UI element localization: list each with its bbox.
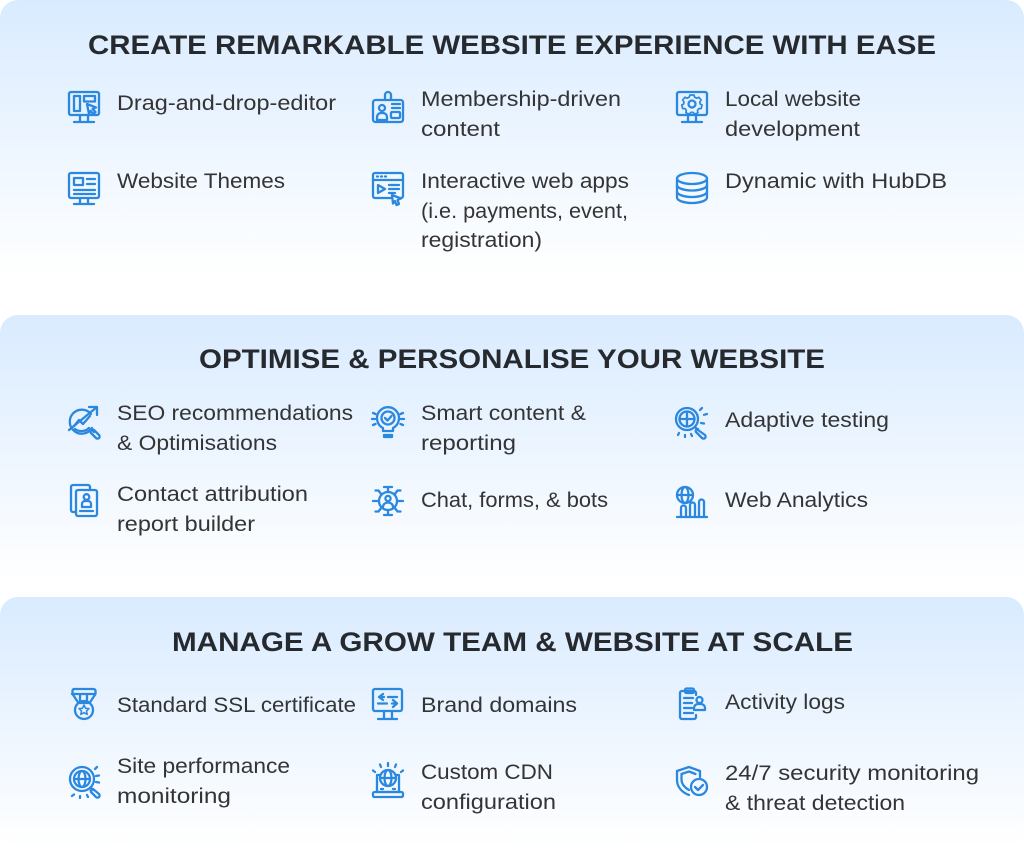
item: custom cdn configuration: Custom CDN: [421, 760, 553, 784]
item: site performance monitoring: Site performance: [117, 754, 290, 778]
icon: magnifier with chart: [676, 408, 707, 439]
icon: contact documents: [71, 485, 97, 516]
item: contact attribution report builder: Contact attribution: [117, 482, 308, 506]
item: chat, forms and bots: [373, 487, 608, 515]
icon: person in network: [373, 487, 403, 515]
heading: manage a grow team: MANAGE A GROW TEAM & WEBSITE AT SCALE: [172, 627, 853, 657]
icon: database: [677, 173, 707, 203]
panel: create remarkable website experience: [0, 0, 1024, 300]
icon: magnifier with globe: [70, 767, 100, 798]
item: interactive web apps: Interactive web apps: [421, 169, 629, 193]
item: smart content and reporting: Smart content &: [421, 401, 586, 425]
item: membership-driven content: [373, 87, 621, 141]
item: smart content and reporting: reporting: [421, 431, 516, 455]
item: dynamic with hubdb: [677, 169, 947, 203]
item: contact attribution report builder: report builder: [117, 512, 255, 536]
icon: monitor with layout and cursor: [69, 92, 99, 122]
item: activity logs: Activity logs: [725, 690, 845, 714]
item: smart content and reporting: [372, 401, 586, 455]
icon: globe and bar chart: [677, 487, 707, 517]
item: chat, forms and bots: Chat, forms, & bots: [421, 488, 608, 512]
item: web analytics: [677, 487, 868, 517]
icon: light bulb with check: [372, 407, 404, 437]
icon: monitor with gear: [677, 92, 707, 122]
item: security monitoring and threat detection: 24/7 security monitoring: [725, 761, 979, 785]
icon: id badge: [373, 92, 403, 122]
item: website themes: Website Themes: [117, 169, 285, 193]
item: drag-and-drop editor: Drag-and-drop-editor: [117, 91, 336, 115]
item: standard ssl certificate: [72, 689, 356, 719]
heading: optimise and personalise: OPTIMISE & PERSONALISE YOUR WEBSITE: [199, 344, 825, 374]
item: seo recommendations: [69, 401, 353, 455]
item: membership-driven content: Membership-driven: [421, 87, 621, 111]
panel: manage a grow team: [0, 597, 1024, 848]
item: dynamic with hubdb: Dynamic with HubDB: [725, 169, 947, 193]
item: interactive web apps: registration): [421, 228, 542, 252]
heading: create remarkable website experience: CREATE REMARKABLE WEBSITE EXPERIENCE WITH EASE: [88, 30, 936, 60]
item: seo recommendations: & Optimisations: [117, 431, 277, 455]
icon: browser window with play button and cursor: [373, 173, 403, 205]
item: standard ssl certificate: Standard SSL certificate: [117, 693, 356, 717]
item: contact attribution report builder: [71, 482, 308, 536]
item: local website development: development: [725, 117, 860, 141]
item: adaptive testing: [676, 408, 889, 439]
item: brand domains: Brand domains: [421, 693, 577, 717]
icon: monitor with page layout: [69, 173, 99, 204]
item: web analytics: Web Analytics: [725, 488, 868, 512]
icon: laptop with globe: [373, 763, 403, 797]
item: adaptive testing: Adaptive testing: [725, 408, 889, 432]
item: local website development: Local website: [725, 87, 861, 111]
panel: optimise and personalise: [0, 315, 1024, 585]
icon: monitor with arrows: [373, 689, 402, 719]
item: local website development: [677, 87, 861, 141]
item: interactive web apps: [373, 169, 629, 252]
item: drag-and-drop editor: [69, 91, 336, 122]
item: site performance monitoring: monitoring: [117, 784, 231, 808]
item: membership-driven content: content: [421, 117, 500, 141]
item: custom cdn configuration: configuration: [421, 790, 556, 814]
item: security monitoring and threat detection: [677, 761, 979, 815]
item: seo recommendations: SEO recommendations: [117, 401, 353, 425]
icon: shield with check: [677, 767, 707, 795]
icon: medal: [72, 689, 96, 719]
item: website themes: [69, 169, 285, 204]
item: security monitoring and threat detection: & threat detection: [725, 791, 905, 815]
item: interactive web apps: (i.e. payments, event,: [421, 199, 628, 223]
item: brand domains: [373, 689, 577, 719]
icon: clipboard with user: [680, 688, 705, 719]
icon: magnifier with growth arrow: [69, 407, 100, 439]
item: activity logs: [680, 688, 845, 719]
item: custom cdn configuration: [373, 760, 556, 814]
item: site performance monitoring: [70, 754, 290, 808]
